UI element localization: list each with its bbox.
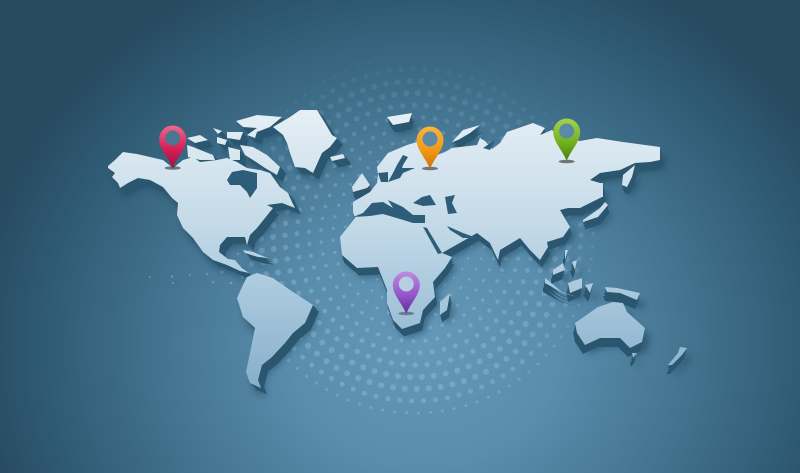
world map surface <box>108 110 687 388</box>
map extrusion <box>110 112 686 394</box>
halftone dot pattern <box>237 57 593 413</box>
pin: purple, southern Africa <box>393 272 420 315</box>
soft drop shadow of the map <box>113 119 692 397</box>
pin: orange, Europe <box>416 126 444 170</box>
faint small dots left of South America <box>149 268 240 284</box>
Americas and Greenland <box>108 110 345 388</box>
pin: red, North America <box>159 126 186 170</box>
Eurasia and Africa <box>340 113 660 329</box>
pin: green, Siberia <box>553 118 580 163</box>
Southeast Asia and Oceania <box>545 250 687 365</box>
inland seas <box>227 140 495 254</box>
